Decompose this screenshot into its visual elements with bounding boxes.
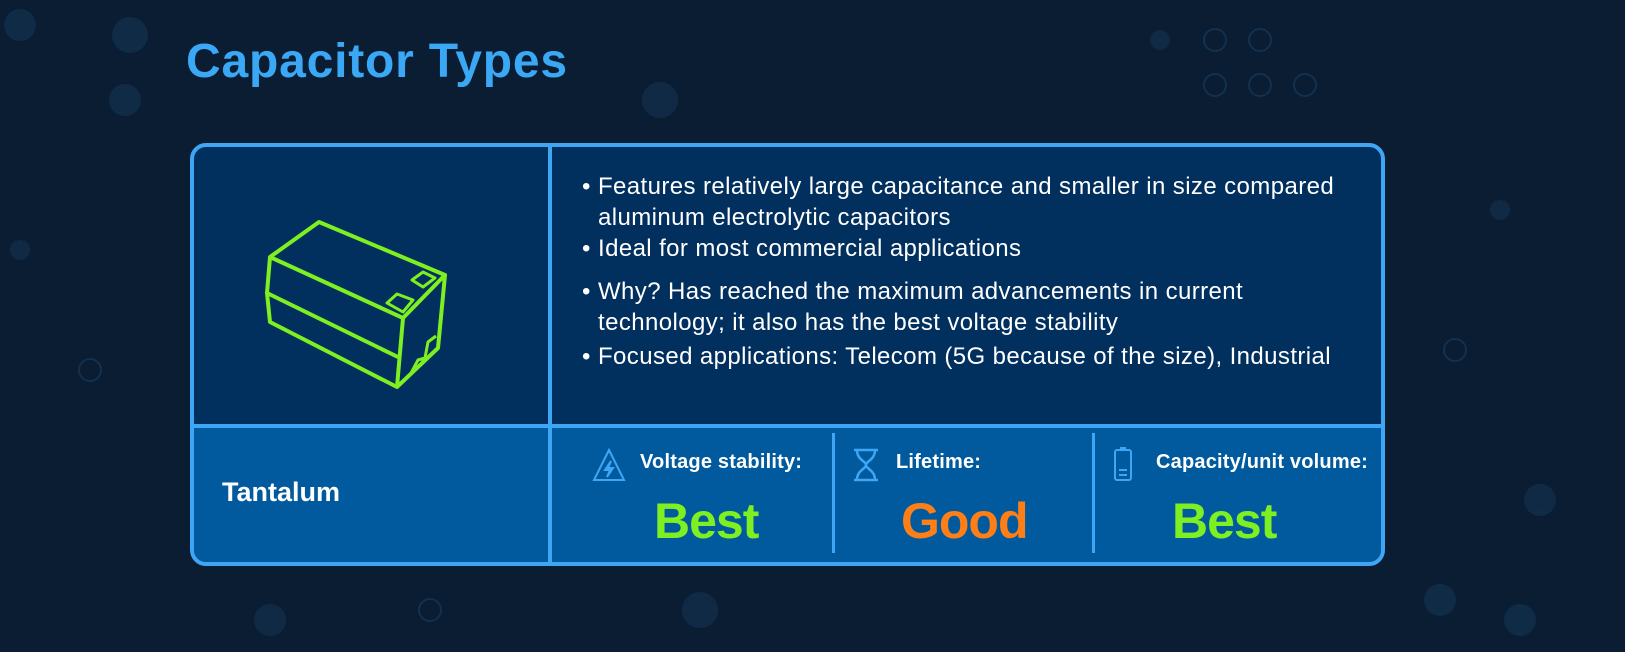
icon: hourglass [854,448,878,482]
text: Why? Has reached the maximum advancements in current [598,278,1243,305]
dividers [832,433,835,553]
metric: voltage stability: Voltage stability: [640,451,802,473]
title: Capacitor Types [186,35,568,88]
text: Ideal for most commercial applications [598,235,1021,262]
text: Good [901,493,1028,549]
text: Features relatively large capacitance and smaller in size compared [598,173,1334,200]
text: • [582,235,591,262]
vertical divider [548,147,552,562]
icon: voltage [592,448,626,481]
text: aluminum electrolytic capacitors [598,204,951,231]
metric: lifetime: Lifetime: [896,451,981,473]
panel: card [190,143,1385,566]
text: • [582,278,591,305]
label: Tantalum: Tantalum [222,477,340,507]
text: • [582,343,591,370]
text: Best [654,493,758,549]
metric: capacity: Capacity/unit volume: [1156,451,1368,473]
icon: tantalum capacitor [265,220,448,390]
bottom row background [194,424,1381,566]
text: Best [1172,493,1276,549]
text: • [582,173,591,200]
icon: battery [1114,447,1132,481]
text: technology; it also has the best voltage stability [598,309,1118,336]
text block: bullets [582,173,1334,370]
text: Focused applications: Telecom (5G because of the size), Industrial [598,343,1331,370]
